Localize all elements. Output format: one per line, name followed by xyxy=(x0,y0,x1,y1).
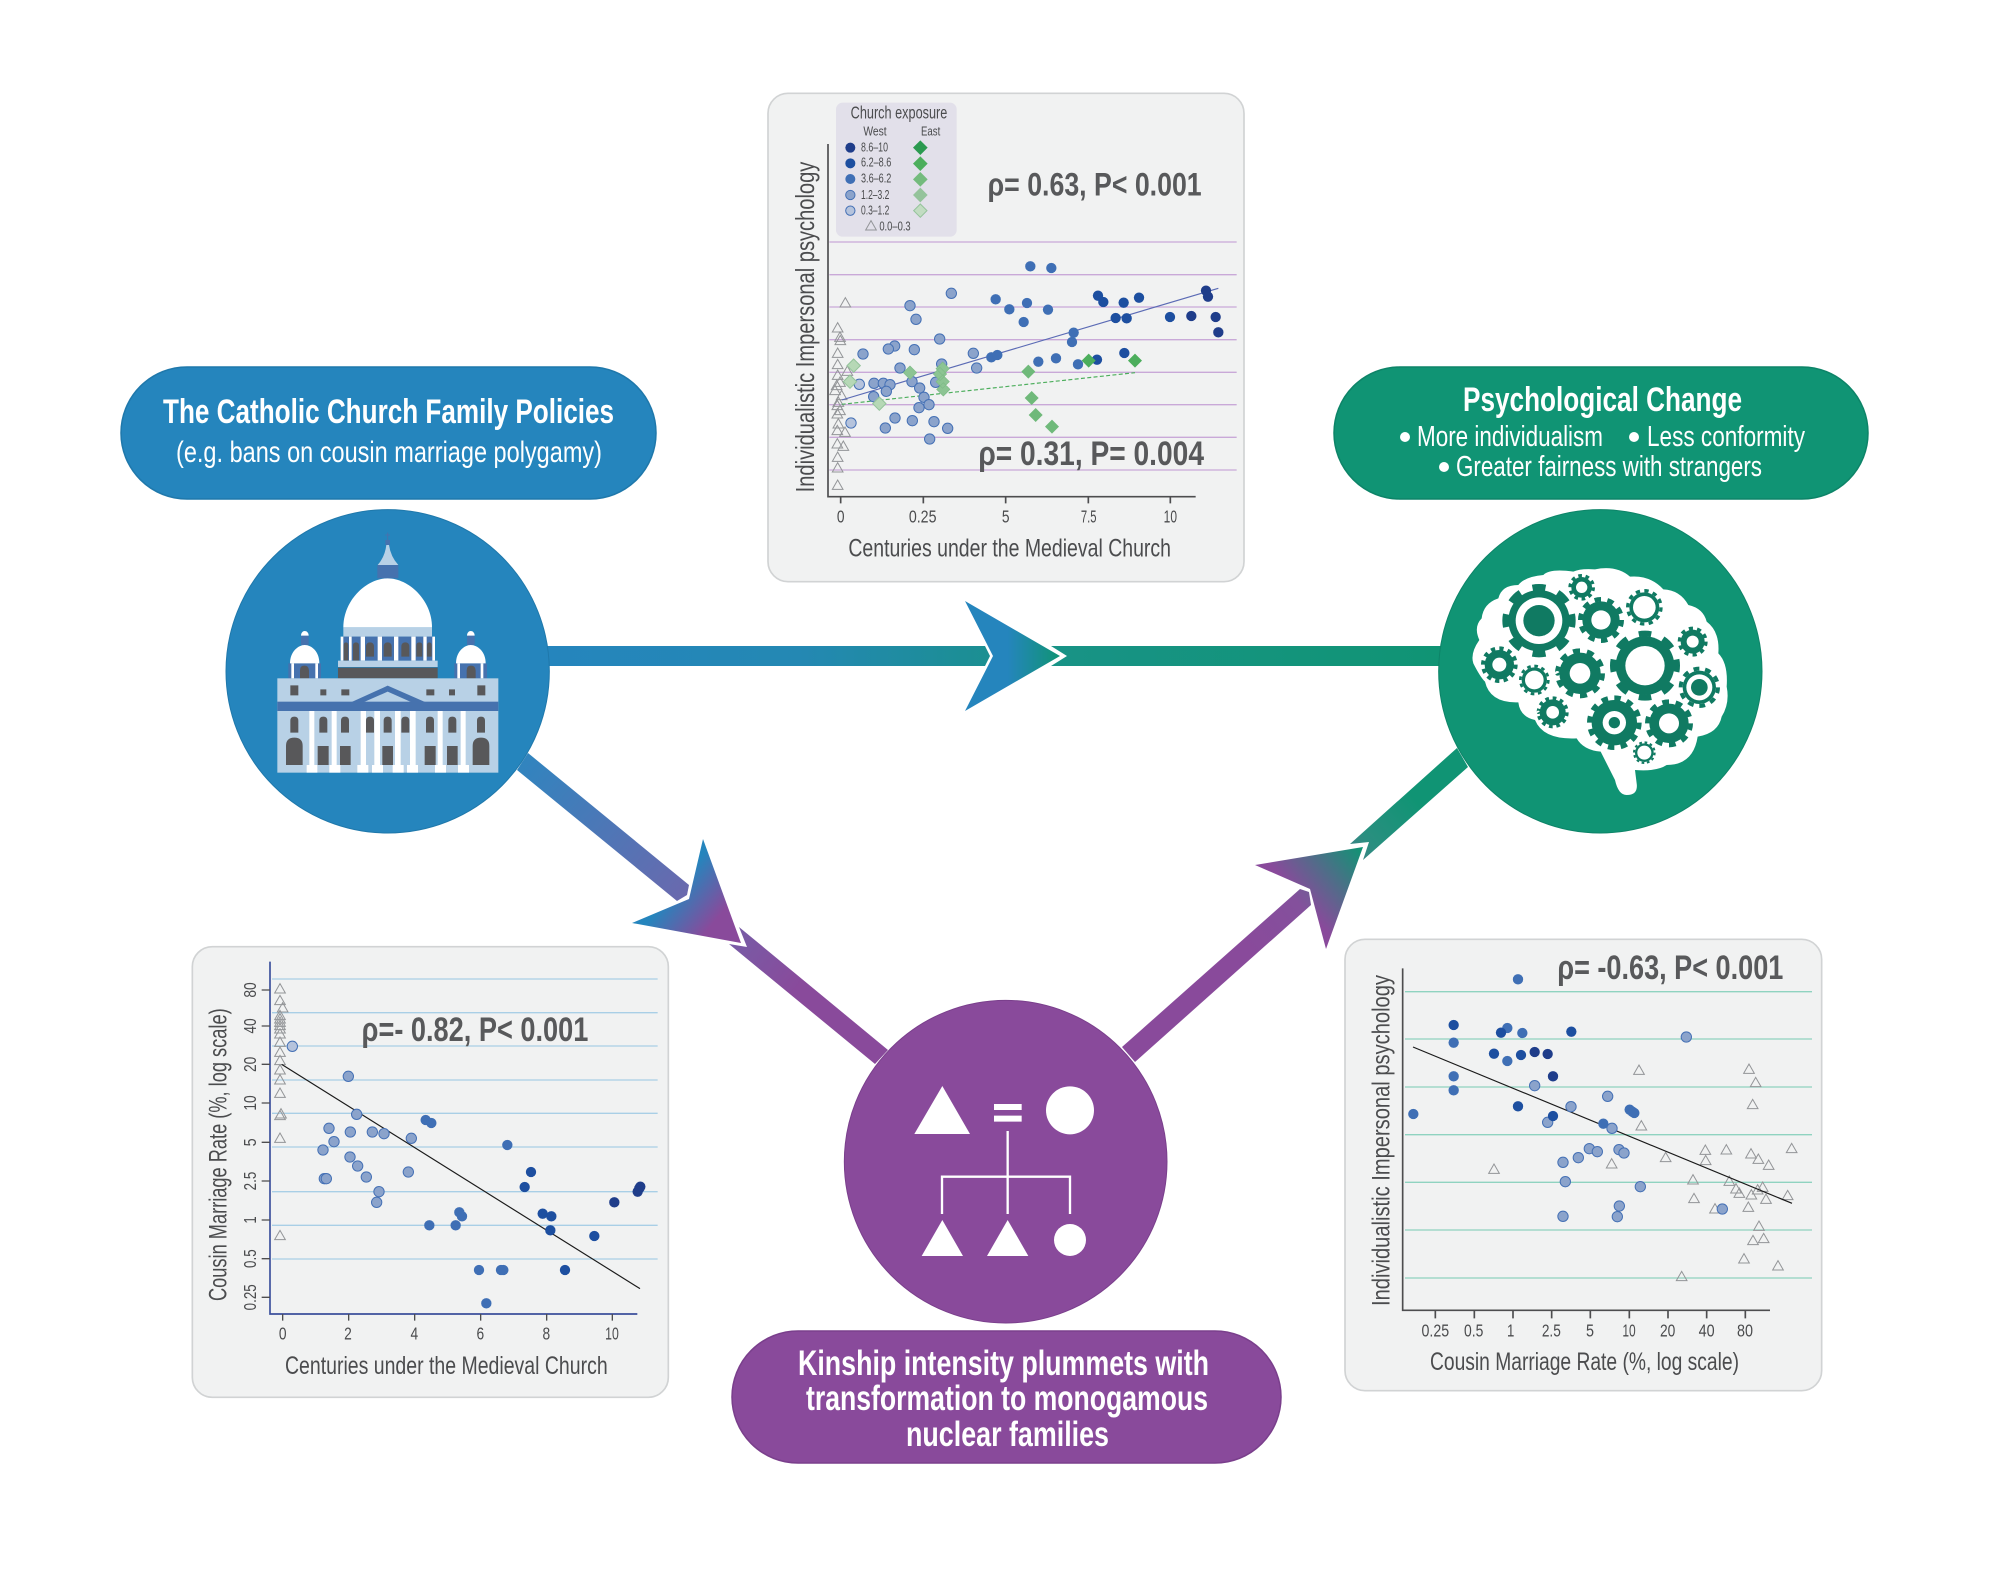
trend line xyxy=(1413,1047,1792,1203)
legend: church exposure: 8.6–10 xyxy=(861,141,888,155)
x tick labels: 8 xyxy=(542,1323,550,1343)
x axis title: Centuries under the Medieval Church xyxy=(848,535,1171,563)
pill text: Kinship intensity plummets with xyxy=(798,1344,1209,1383)
y tick labels: 5 xyxy=(240,1138,260,1146)
trend line: east xyxy=(842,373,1135,404)
icon: brain outline xyxy=(1472,568,1728,795)
axes xyxy=(828,144,1196,503)
arrow: kinship to psychological change xyxy=(1122,748,1468,1062)
bullet list: Less conformity xyxy=(1647,421,1805,453)
y tick labels xyxy=(240,982,260,1310)
y tick labels: 10 xyxy=(240,1095,260,1111)
arrow: church to kinship xyxy=(517,753,888,1064)
west points xyxy=(846,261,1223,444)
x tick labels: 2 xyxy=(344,1323,352,1343)
x tick labels: 6 xyxy=(476,1323,484,1343)
x tick labels: 10 xyxy=(1164,507,1177,527)
y tick labels: 40 xyxy=(240,1018,260,1034)
x tick labels: 0 xyxy=(279,1323,286,1343)
icon: gears xyxy=(1483,576,1718,763)
y tick labels: 0.5 xyxy=(240,1249,260,1268)
panel: centuries vs cousin marriage chart xyxy=(192,947,668,1397)
y axis title: Individualistic Impersonal psychology xyxy=(790,162,820,492)
x tick labels xyxy=(1421,1321,1753,1341)
circle icon: church xyxy=(226,510,549,833)
icon: family tree xyxy=(914,1086,1094,1256)
x tick labels: 10 xyxy=(1622,1321,1636,1341)
y tick labels: 20 xyxy=(240,1057,260,1072)
legend: church exposure: 1.2–3.2 xyxy=(861,188,889,202)
data points xyxy=(287,1041,645,1308)
x tick labels: 0.25 xyxy=(1421,1321,1449,1341)
x tick labels: 10 xyxy=(605,1323,619,1343)
legend: church exposure: 3.6–6.2 xyxy=(861,172,891,186)
y tick labels: 1 xyxy=(240,1216,260,1224)
panel: centuries vs individualistic psychology chart xyxy=(768,93,1244,582)
legend: church exposure: 0.0–0.3 xyxy=(879,219,911,233)
bullet list: More individualism xyxy=(1417,421,1603,453)
x tick labels: 7.5 xyxy=(1081,507,1096,527)
triangle markers xyxy=(275,984,288,1240)
x tick labels: 5 xyxy=(1586,1321,1594,1341)
bullet list xyxy=(1400,421,1805,483)
x tick labels: 2.5 xyxy=(1542,1321,1561,1341)
correlation east: ρ= 0.31, P= 0.004 xyxy=(978,435,1204,473)
data points xyxy=(1408,974,1727,1222)
pill: kinship intensity xyxy=(732,1331,1281,1463)
trend line: west xyxy=(842,288,1218,400)
x tick labels: 0.5 xyxy=(1464,1321,1483,1341)
x tick labels: 20 xyxy=(1660,1321,1675,1341)
legend: church exposure: 0.3–1.2 xyxy=(861,203,889,217)
icon: basilica xyxy=(277,533,498,773)
y tick labels: 2.5 xyxy=(240,1172,260,1190)
y tick labels: 80 xyxy=(240,982,260,998)
correlation: ρ= -0.63, P< 0.001 xyxy=(1557,949,1783,987)
circle icon: nuclear family xyxy=(844,1000,1167,1323)
x tick labels: 0.25 xyxy=(909,507,936,527)
arrow: church to psychological change xyxy=(540,601,1450,711)
pill: Catholic Church family policies xyxy=(121,367,656,499)
x tick labels: 40 xyxy=(1699,1321,1715,1341)
legend: church exposure: 6.2–8.6 xyxy=(861,156,891,170)
x tick labels xyxy=(837,507,1177,527)
panel: cousin marriage vs individualistic psychology chart xyxy=(1345,939,1822,1391)
y axis title: Cousin Marriage Rate (%, log scale) xyxy=(205,1008,233,1301)
east points xyxy=(843,354,1142,434)
legend: church exposure: East xyxy=(921,124,941,139)
legend: church exposure: Church exposure xyxy=(851,102,947,122)
triangle markers xyxy=(830,298,853,489)
pill text: transformation to monogamous xyxy=(806,1379,1208,1418)
axes xyxy=(262,962,637,1321)
trend line xyxy=(282,1064,640,1289)
x axis title: Cousin Marriage Rate (%, log scale) xyxy=(1430,1348,1739,1376)
x tick labels: 1 xyxy=(1507,1321,1514,1341)
legend: church exposure: West xyxy=(863,124,887,139)
pill: psychological change xyxy=(1334,367,1868,499)
bullet list: Greater fairness with strangers xyxy=(1456,451,1762,483)
triangle markers xyxy=(1489,1064,1797,1281)
pill heading: Psychological Change xyxy=(1463,381,1742,419)
pill heading: The Catholic Church Family Policies xyxy=(163,393,614,431)
pill text: nuclear families xyxy=(906,1415,1109,1454)
legend: church exposure xyxy=(836,102,957,237)
correlation west: ρ= 0.63, P< 0.001 xyxy=(988,166,1202,203)
x tick labels: 5 xyxy=(1002,507,1009,527)
y axis title: Individualistic Impersonal psychology xyxy=(1367,975,1395,1306)
axes xyxy=(1403,968,1770,1318)
x tick labels: 0 xyxy=(837,507,844,527)
x axis title: Centuries under the Medieval Church xyxy=(285,1352,608,1380)
correlation: ρ=- 0.82, P< 0.001 xyxy=(362,1011,588,1049)
pill text xyxy=(798,1344,1209,1454)
x tick labels xyxy=(279,1323,619,1343)
x tick labels: 80 xyxy=(1737,1321,1753,1341)
pill subheading: (e.g. bans on cousin marriage polygamy) xyxy=(176,436,602,469)
circle icon: brain with gears xyxy=(1439,510,1762,833)
x tick labels: 4 xyxy=(410,1323,418,1343)
y tick labels: 0.25 xyxy=(240,1284,260,1310)
